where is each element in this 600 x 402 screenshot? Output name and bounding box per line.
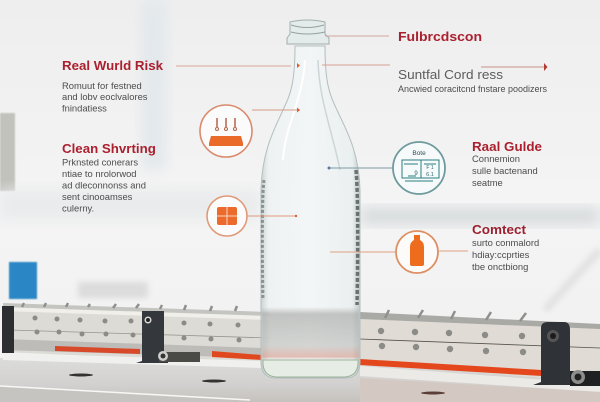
icon: orange bottle	[330, 231, 468, 273]
body text: Ancwied coracitcnd fnstare poodizers	[398, 84, 548, 94]
subheading: Suntfal Cord ress	[398, 68, 503, 82]
callout: Suntfal Cord ress	[322, 63, 548, 94]
callout: Comtect	[472, 222, 539, 272]
connector line	[176, 65, 291, 67]
heading: Clean Shvrting	[62, 141, 156, 156]
icon: data panel: 9	[414, 171, 418, 177]
conveyor rail	[0, 303, 600, 402]
icon: data panel	[328, 142, 445, 194]
body text: seatme	[472, 177, 503, 188]
connector line	[325, 35, 389, 37]
marker dot on neck	[297, 63, 300, 68]
body text: ntiae to nrolorwod	[62, 168, 137, 179]
glass bottle	[261, 20, 360, 378]
body text: ad dleconnonss and	[62, 180, 146, 190]
body text: Romuut for festned	[62, 80, 142, 91]
arrow	[481, 66, 544, 68]
body text: sulle bactenand	[472, 165, 538, 176]
body text: surto conmalord	[472, 237, 539, 248]
icon: data panel: F 1	[426, 165, 434, 171]
callout: Raal Gulde	[472, 139, 542, 188]
body text: Connemion	[472, 153, 520, 164]
heading: Raal Gulde	[472, 139, 542, 154]
heading: Fulbrcdscon	[398, 29, 482, 44]
heading: Real Wurld Risk	[62, 58, 164, 73]
body text: tbe onctbiong	[472, 261, 528, 272]
icon: orange grid box	[207, 196, 297, 236]
icon: data panel: Bote	[412, 150, 426, 157]
callout: Clean Shvrting	[62, 141, 156, 214]
body text: culerny.	[62, 202, 94, 214]
icon: data panel: 6.1	[426, 172, 434, 178]
connector line	[322, 64, 390, 66]
body text: Prknsted conerars	[62, 156, 138, 168]
body text: hdiay:ccprties	[472, 249, 530, 260]
heading: Comtect	[472, 222, 527, 237]
icon: heat over tray	[200, 105, 300, 157]
body text: and lobv eoclvalores	[62, 91, 148, 102]
callout: Real Wurld Risk	[62, 58, 291, 114]
body text: sent cinooamses	[62, 191, 133, 202]
body text: fnindatiess	[62, 102, 107, 114]
